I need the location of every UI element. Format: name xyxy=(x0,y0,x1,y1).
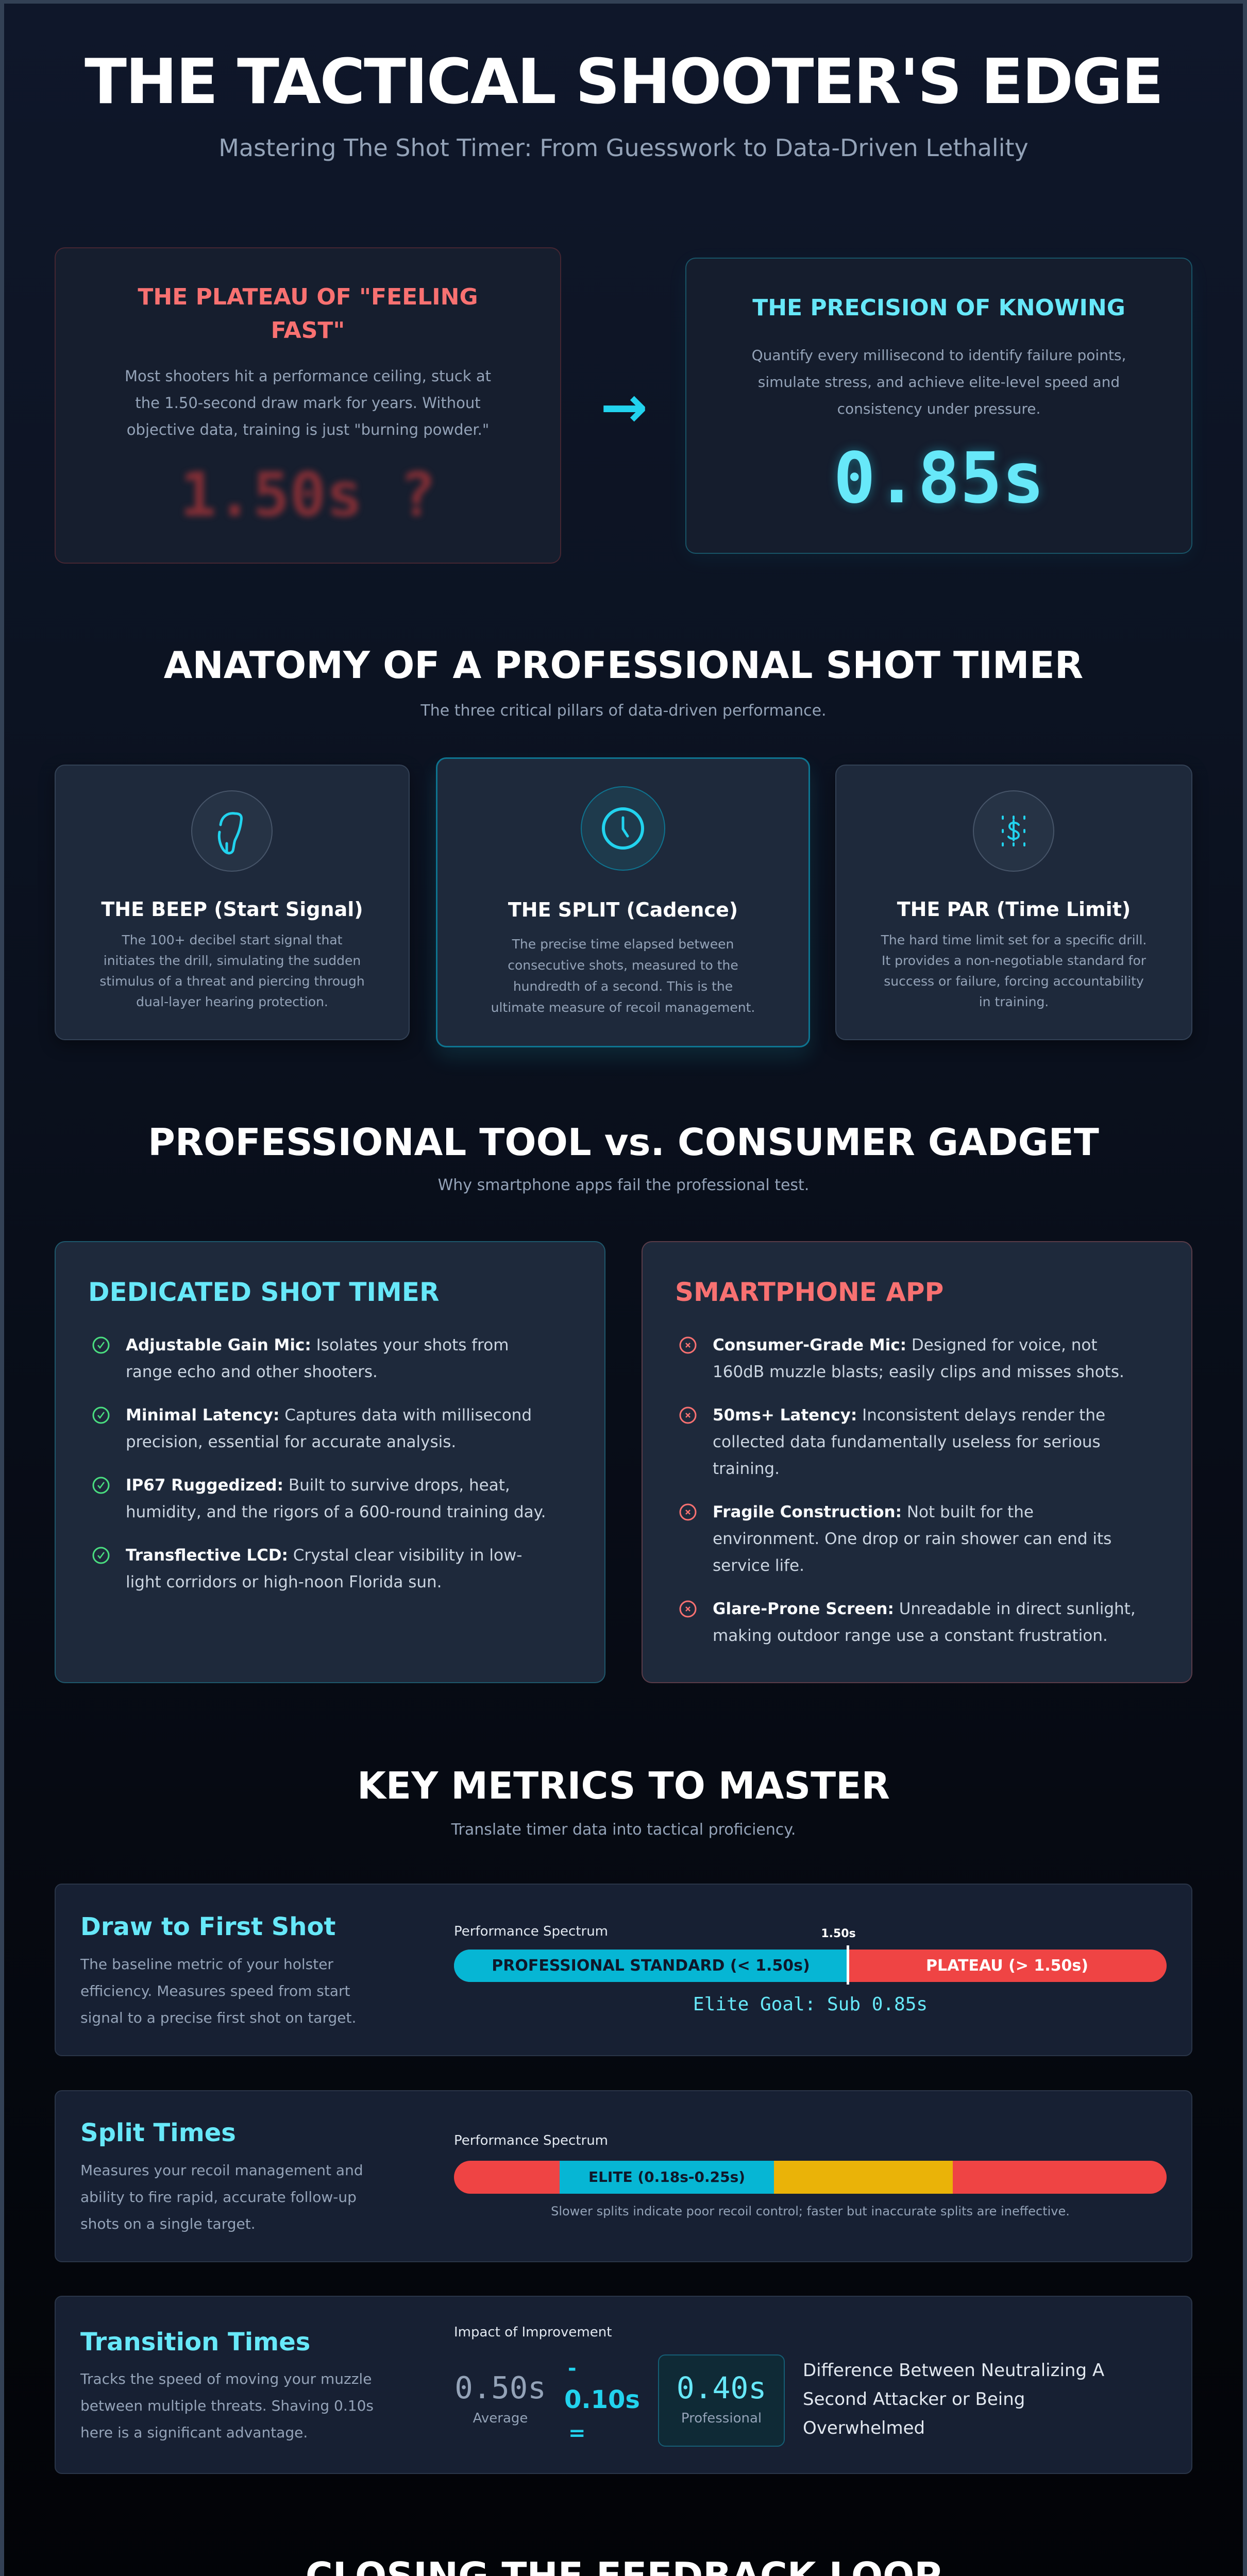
plateau heading: FAST" xyxy=(271,317,345,344)
item: consumer mic xyxy=(679,1336,1124,1381)
draw spectrum chart: Performance Spectrum xyxy=(454,1924,608,1939)
par text xyxy=(881,933,1147,1009)
transition heading: Transition Times xyxy=(80,2328,310,2357)
item: fragile xyxy=(679,1503,1111,1575)
big time: 0.85s xyxy=(833,438,1044,519)
draw text: The baseline metric of your holster xyxy=(80,1956,333,1973)
transition text: here is a significant advantage. xyxy=(80,2424,308,2441)
impact comparison: 0.10s xyxy=(564,2385,640,2414)
blurred time: 1.50s ? xyxy=(180,459,436,530)
item: latency: precision, essential for accurate analysis. xyxy=(126,1433,456,1451)
item: fragile: service life. xyxy=(713,1556,804,1575)
precision heading: THE PRECISION OF KNOWING xyxy=(752,295,1125,321)
precision text: consistency under pressure. xyxy=(837,400,1040,417)
draw spectrum chart: Elite Goal: Sub 0.85s xyxy=(693,1994,928,2015)
dedicated heading: DEDICATED SHOT TIMER xyxy=(88,1277,439,1307)
split text: The precise time elapsed between xyxy=(512,937,734,952)
item: lcd: light corridors or high-noon Florida sun. xyxy=(126,1573,442,1591)
impact comparison: Second Attacker or Being xyxy=(803,2389,1025,2410)
item: latency xyxy=(93,1406,532,1451)
item: gain mic: range echo and other shooters. xyxy=(126,1363,378,1381)
split spectrum chart: ELITE (0.18s-0.25s) xyxy=(588,2168,745,2185)
item: glare xyxy=(679,1600,1136,1645)
transition text xyxy=(80,2370,374,2441)
plateau text xyxy=(125,367,491,438)
impact comparison xyxy=(454,2325,1104,2447)
impact comparison: - xyxy=(568,2357,577,2380)
split text: ultimate measure of recoil management. xyxy=(491,1000,755,1015)
draw spectrum chart xyxy=(454,1924,1167,2015)
split text xyxy=(491,937,755,1015)
subheading: key metrics: Translate timer data into tactical proficiency. xyxy=(451,1821,796,1839)
subheading: comparison: Why smartphone apps fail the professional test. xyxy=(438,1176,809,1194)
beep heading: THE BEEP (Start Signal) xyxy=(101,898,363,921)
split text: ability to fire rapid, accurate follow-up xyxy=(80,2189,357,2206)
plateau heading xyxy=(138,284,478,344)
panel: precision xyxy=(685,258,1192,554)
beep text: initiates the drill, simulating the sudden xyxy=(104,953,361,968)
heading: anatomy: ANATOMY OF A PROFESSIONAL SHOT TIMER xyxy=(164,643,1083,687)
par text: success or failure, forcing accountability xyxy=(884,974,1144,989)
beep text: stimulus of a threat and piercing through xyxy=(99,974,365,989)
card: split xyxy=(436,757,810,1047)
item: 50ms latency xyxy=(679,1406,1105,1478)
beep text: dual-layer hearing protection. xyxy=(136,994,328,1009)
item: lcd xyxy=(93,1546,522,1591)
item: ruggedized xyxy=(93,1476,546,1521)
split text: hundredth of a second. This is the xyxy=(513,979,733,994)
panel: dedicated shot timer xyxy=(55,1241,605,1683)
draw text: signal to a precise first shot on target. xyxy=(80,2009,356,2026)
draw heading: Draw to First Shot xyxy=(80,1912,335,1941)
precision text xyxy=(752,347,1126,417)
plateau text: Most shooters hit a performance ceiling, stuck at xyxy=(125,367,491,385)
plateau text: objective data, training is just "burning powder." xyxy=(127,421,489,438)
icon: clock xyxy=(581,786,665,871)
metric card: transition xyxy=(55,2296,1192,2474)
draw spectrum chart: 1.50s xyxy=(821,1927,856,1940)
precision text: simulate stress, and achieve elite-level speed and xyxy=(758,374,1120,391)
split text: shots on a single target. xyxy=(80,2215,256,2232)
item: 50ms latency: 50ms+ Latency: Inconsistent delays render the xyxy=(713,1406,1105,1425)
card: par xyxy=(835,765,1192,1040)
draw text: efficiency. Measures speed from start xyxy=(80,1982,350,1999)
panel: plateau xyxy=(55,247,561,564)
item: 50ms latency: collected data fundamentally useless for serious xyxy=(713,1433,1101,1451)
item: 50ms latency: training. xyxy=(713,1460,780,1478)
item: ruggedized: IP67 Ruggedized: Built to survive drops, heat, xyxy=(126,1476,510,1495)
par heading: THE PAR (Time Limit) xyxy=(897,898,1131,921)
beep text xyxy=(99,933,365,1009)
heading: comparison: PROFESSIONAL TOOL vs. CONSUMER GADGET xyxy=(148,1121,1099,1164)
par text: in training. xyxy=(979,994,1049,1009)
card: beep xyxy=(55,765,410,1040)
split spectrum chart: Performance Spectrum xyxy=(454,2133,608,2148)
metric card: split times xyxy=(55,2090,1192,2262)
item: glare: making outdoor range use a constant frustration. xyxy=(713,1626,1108,1645)
item: consumer mic: 160dB muzzle blasts; easily clips and misses shots. xyxy=(713,1363,1124,1381)
impact comparison: = xyxy=(568,2421,586,2445)
transition text: between multiple threats. Shaving 0.10s xyxy=(80,2397,374,2414)
precision text: Quantify every millisecond to identify failure points, xyxy=(752,347,1126,364)
icon: par xyxy=(973,790,1054,872)
subheading: anatomy: The three critical pillars of data-driven performance. xyxy=(420,702,827,720)
split text: consecutive shots, measured to the xyxy=(508,958,738,973)
split spectrum chart: Slower splits indicate poor recoil control; faster but inaccurate splits are ineffective. xyxy=(551,2204,1070,2218)
impact comparison: Professional xyxy=(681,2411,762,2426)
item: lcd: Transflective LCD: Crystal clear visibility in low- xyxy=(126,1546,522,1565)
par text: The hard time limit set for a specific drill. xyxy=(881,933,1147,947)
impact comparison: Difference Between Neutralizing A xyxy=(803,2360,1104,2381)
draw spectrum chart: PLATEAU (> 1.50s) xyxy=(926,1957,1088,1975)
title: THE TACTICAL SHOOTER'S EDGE xyxy=(85,46,1162,118)
heading: key metrics: KEY METRICS TO MASTER xyxy=(357,1764,890,1807)
arrow: → xyxy=(600,374,648,440)
transition text: Tracks the speed of moving your muzzle xyxy=(80,2370,372,2387)
split spectrum chart xyxy=(454,2133,1167,2218)
item: consumer mic: Consumer-Grade Mic: Designed for voice, not xyxy=(713,1336,1098,1354)
item: fragile: environment. One drop or rain shower can end its xyxy=(713,1530,1111,1548)
icon: beep xyxy=(191,790,273,872)
smartphone heading: SMARTPHONE APP xyxy=(675,1277,943,1307)
item: latency: Minimal Latency: Captures data with millisecond xyxy=(126,1406,532,1425)
plateau text: the 1.50-second draw mark for years. Without xyxy=(135,394,481,412)
impact comparison: Overwhelmed xyxy=(803,2418,925,2438)
split text xyxy=(80,2162,363,2232)
metric card: draw xyxy=(55,1884,1192,2056)
split heading: Split Times xyxy=(80,2119,236,2147)
impact comparison: Average xyxy=(473,2411,528,2426)
impact comparison: Impact of Improvement xyxy=(454,2325,612,2340)
item: ruggedized: humidity, and the rigors of a 600-round training day. xyxy=(126,1503,546,1521)
beep text: The 100+ decibel start signal that xyxy=(122,933,342,947)
item: gain mic: Adjustable Gain Mic: Isolates your shots from xyxy=(126,1336,509,1354)
item: gain mic xyxy=(93,1336,509,1381)
item: fragile: Fragile Construction: Not built for the xyxy=(713,1503,1034,1521)
subtitle: Mastering The Shot Timer: From Guesswork to Data-Driven Lethality xyxy=(218,134,1029,162)
draw text xyxy=(80,1956,356,2026)
panel: smartphone app xyxy=(642,1241,1192,1683)
impact comparison: 0.50s xyxy=(454,2370,546,2405)
plateau heading: THE PLATEAU OF "FEELING xyxy=(138,284,478,310)
draw spectrum chart: PROFESSIONAL STANDARD (< 1.50s) xyxy=(492,1957,810,1975)
item: glare: Glare-Prone Screen: Unreadable in direct sunlight, xyxy=(713,1600,1136,1618)
par text: It provides a non-negotiable standard for xyxy=(882,953,1146,968)
impact comparison: 0.40s xyxy=(677,2370,766,2405)
split heading: THE SPLIT (Cadence) xyxy=(508,899,738,921)
split text: Measures your recoil management and xyxy=(80,2162,363,2179)
